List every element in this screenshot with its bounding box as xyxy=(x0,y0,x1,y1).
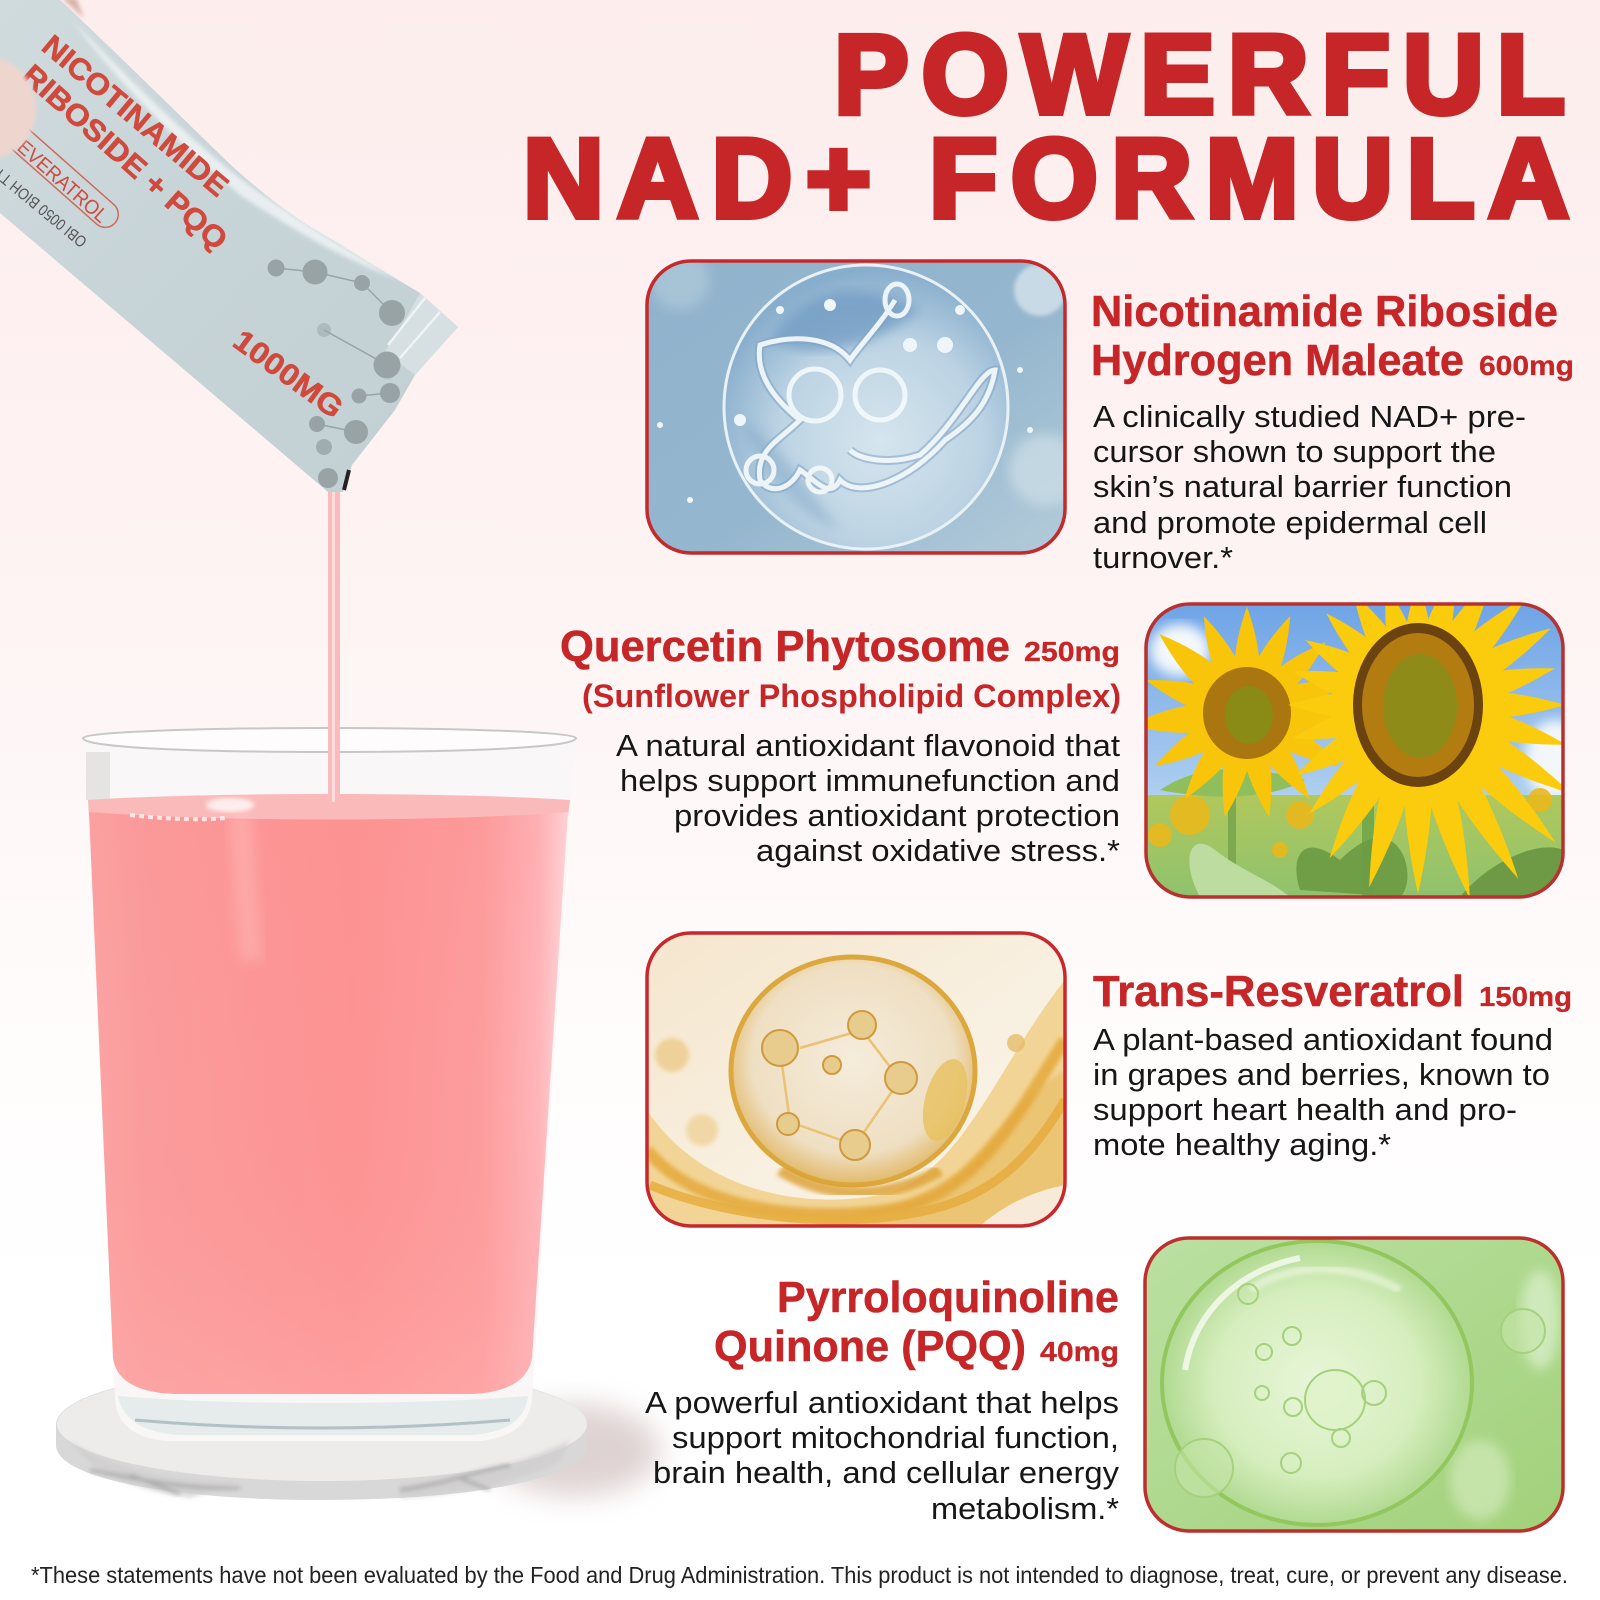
text block: nicotinamide riboside: turnover.* xyxy=(1093,541,1233,575)
text block: pyrroloquinoline quinone: Quinone (PQQ) xyxy=(714,1323,1026,1371)
text block: pyrroloquinoline quinone xyxy=(645,1274,1120,1526)
illustration: stream of pink liquid xyxy=(328,490,340,802)
text block: pyrroloquinoline quinone: metabolism.* xyxy=(931,1492,1119,1526)
text block: trans-resveratrol: Trans-Resveratrol xyxy=(1093,968,1464,1016)
text block: pyrroloquinoline quinone: Pyrroloquinoline xyxy=(777,1274,1119,1322)
sachet label text: RIBOSIDE + PQQ xyxy=(15,59,233,257)
text block: trans-resveratrol: mote healthy aging.* xyxy=(1093,1128,1391,1162)
text block: quercetin phytosome: provides antioxidant protection xyxy=(674,799,1120,833)
text block: trans-resveratrol: in grapes and berries, known to xyxy=(1093,1058,1550,1092)
illustration: glass of pink drink xyxy=(83,728,576,1441)
text block: nicotinamide riboside: skin’s natural barrier function xyxy=(1093,470,1512,504)
text block: nicotinamide riboside: and promote epidermal cell xyxy=(1093,506,1487,540)
text block: pyrroloquinoline quinone: support mitochondrial function, xyxy=(672,1421,1119,1455)
sachet label text: 1000MG xyxy=(227,324,349,425)
text block: nicotinamide riboside: Hydrogen Maleate xyxy=(1091,337,1464,385)
small sunflower xyxy=(1148,606,1339,817)
text block: quercetin phytosome: (Sunflower Phospholipid Complex) xyxy=(582,678,1121,714)
illustration: fingers holding sachet xyxy=(0,0,84,158)
text block: nicotinamide riboside: cursor shown to support the xyxy=(1093,435,1496,469)
text block: nicotinamide riboside: A clinically studied NAD+ pre- xyxy=(1093,400,1526,434)
panel: pqq image xyxy=(1145,1238,1563,1531)
large sunflower xyxy=(1288,606,1562,896)
text block: quercetin phytosome: helps support immunefunction and xyxy=(620,764,1120,798)
text block: trans-resveratrol: support heart health and pro- xyxy=(1093,1093,1517,1127)
illustration: sachet: EVERATROL xyxy=(13,136,112,228)
text block: quercetin phytosome: against oxidative stress.* xyxy=(756,834,1120,868)
coaster shadow xyxy=(490,1404,660,1496)
text block: pyrroloquinoline quinone: 40mg xyxy=(1040,1336,1119,1367)
sachet label text xyxy=(15,29,349,425)
panel: trans-resveratrol image xyxy=(647,933,1065,1228)
text block: pyrroloquinoline quinone: A powerful antioxidant that helps xyxy=(645,1386,1119,1420)
text block: nicotinamide riboside: Nicotinamide Riboside xyxy=(1091,288,1558,336)
text block: trans-resveratrol: A plant-based antioxidant found xyxy=(1093,1023,1553,1057)
illustration: sachet xyxy=(0,0,458,492)
text block: nicotinamide riboside: 600mg xyxy=(1479,350,1574,381)
text block: pyrroloquinoline quinone: brain health, and cellular energy xyxy=(653,1456,1120,1490)
illustration: marble coaster xyxy=(56,1367,587,1500)
text block: trans-resveratrol: 150mg xyxy=(1479,981,1572,1012)
title: NAD+ FORMULA xyxy=(523,116,1569,241)
text block: quercetin phytosome: Quercetin Phytosome xyxy=(560,623,1010,671)
text block: quercetin phytosome xyxy=(560,623,1121,868)
text block: trans-resveratrol xyxy=(1093,968,1572,1162)
text block: nicotinamide riboside xyxy=(1091,288,1574,575)
text block: quercetin phytosome: 250mg xyxy=(1024,636,1120,667)
title xyxy=(523,12,1569,241)
text block: quercetin phytosome: A natural antioxidant flavonoid that xyxy=(616,729,1121,763)
sachet label text: NICOTINAMIDE xyxy=(36,29,234,203)
title: POWERFUL xyxy=(834,12,1565,137)
panel: nicotinamide riboside image xyxy=(647,250,1081,553)
sachet molecule pattern xyxy=(268,260,405,488)
panel: sunflower image xyxy=(1144,602,1565,899)
